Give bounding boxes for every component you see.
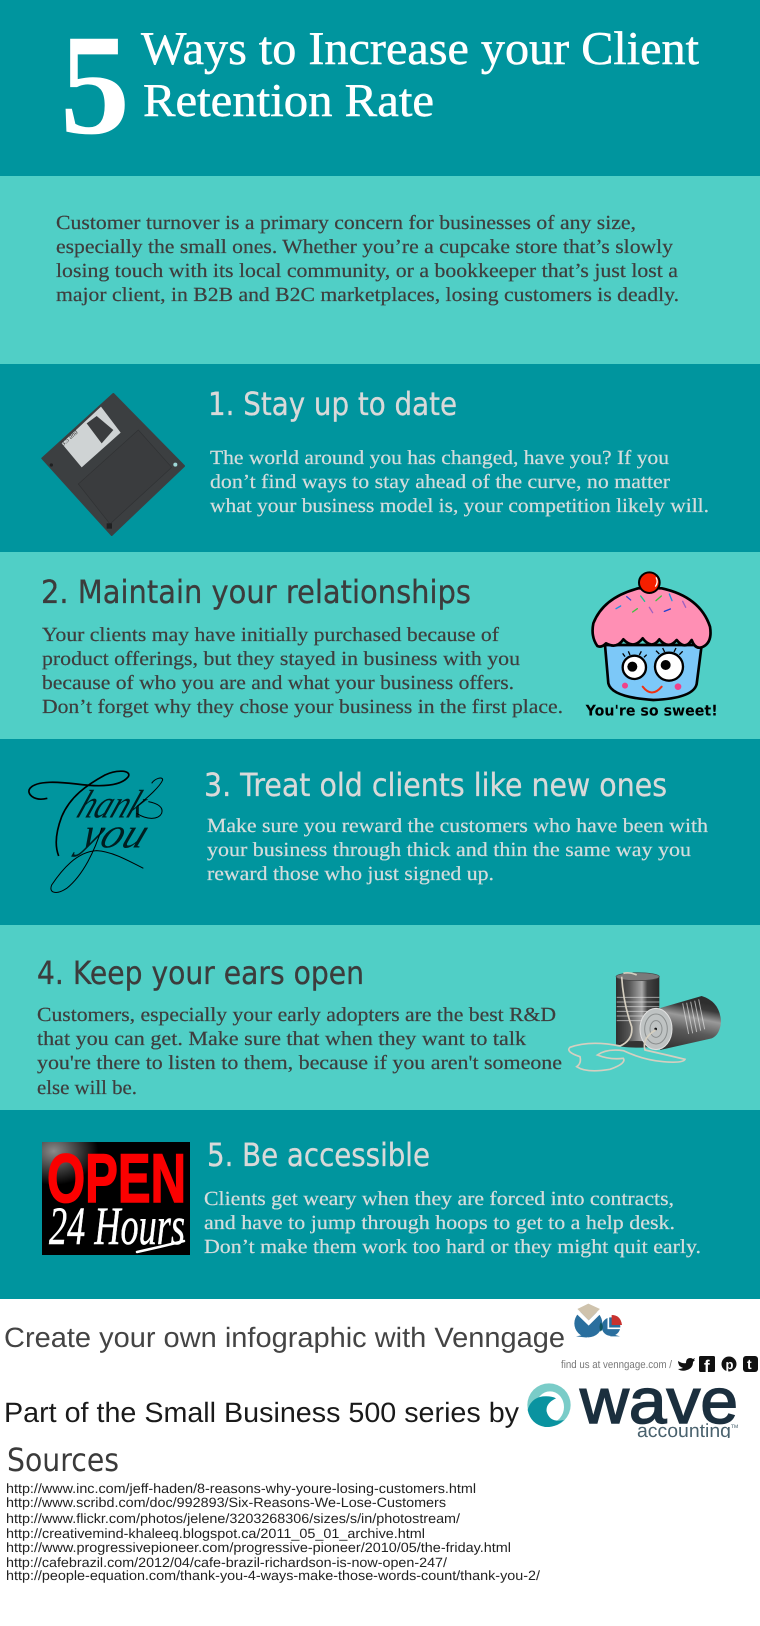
- body text: and have to jump through hoops to get to a help desk.: [204, 1212, 675, 1234]
- icon: social media icons: t: [747, 1356, 752, 1372]
- intro text: especially the small ones. Whether you’re a cupcake store that’s slowly: [56, 236, 673, 258]
- venngage credit text: Create your own infographic with Venngage: [4, 1322, 565, 1353]
- heading: 2. Maintain your relationships: [41, 573, 471, 611]
- body text: Don’t make them work too hard or they might quit early.: [204, 1236, 701, 1258]
- body text: Don’t forget why they chose your business in the first place.: [42, 696, 563, 718]
- heading: 4. Keep your ears open: [37, 954, 364, 992]
- title text: Retention Rate: [143, 75, 434, 127]
- icon: thank you script: you: [71, 809, 157, 857]
- body text: [207, 815, 708, 885]
- intro text: [56, 212, 679, 306]
- body text: don’t find ways to stay ahead of the curve, no matter: [210, 471, 670, 493]
- panel: footer: [4, 1304, 758, 1583]
- body text: [37, 1004, 562, 1099]
- body text: product offerings, but they stayed in business with you: [42, 648, 520, 670]
- source links: http://www.scribd.com/doc/992893/Six-Reasons-We-Lose-Customers: [6, 1495, 446, 1510]
- series credit text: Part of the Small Business 500 series by: [4, 1397, 519, 1428]
- body text: you're there to listen to them, because if you aren't someone: [37, 1052, 562, 1074]
- sources heading: Sources: [7, 1441, 119, 1479]
- intro text: losing touch with its local community, or a bookkeeper that’s just lost a: [56, 260, 678, 282]
- body text: else will be.: [37, 1077, 137, 1099]
- script words: hank: [71, 782, 155, 826]
- source links: http://people-equation.com/thank-you-4-ways-make-those-words-count/thank-you-2/: [6, 1568, 540, 1583]
- sign word OPEN: OPEN: [47, 1140, 186, 1217]
- icon: venngage logo: [574, 1304, 622, 1338]
- label text on disk: 3.5 and: [59, 428, 80, 447]
- body text: [42, 624, 563, 718]
- title text: [141, 23, 699, 127]
- intro text: major client, in B2B and B2C marketplaces, losing customers is deadly.: [56, 284, 679, 306]
- icon: tin can telephone: [569, 973, 721, 1071]
- body text: that you can get. Make sure that when they want to talk: [37, 1028, 526, 1050]
- icon: cupcake: [585, 572, 718, 719]
- body text: The world around you has changed, have you? If you: [210, 447, 669, 469]
- wordmark wave: wave: [579, 1365, 738, 1437]
- body text: Your clients may have initially purchased because of: [42, 624, 499, 646]
- source links: http://cafebrazil.com/2012/04/cafe-brazil-richardson-is-now-open-247/: [6, 1555, 447, 1570]
- caption text: You're so sweet!: [585, 702, 718, 719]
- body text: [204, 1188, 701, 1258]
- body text: Make sure you reward the customers who have been with: [207, 815, 708, 837]
- title numeral 5: 5: [60, 6, 130, 165]
- icon: open 24 hours sign: [42, 1140, 190, 1256]
- heading: 3. Treat old clients like new ones: [204, 766, 667, 804]
- panel: intro: [0, 176, 760, 364]
- logo: wave accounting: [527, 1383, 738, 1438]
- panel: section 3 treat old clients: [0, 739, 760, 925]
- body text: your business through thick and thin the same way you: [207, 839, 691, 861]
- body text: Customers, especially your early adopters are the best R&D: [37, 1004, 556, 1026]
- heading: 1. Stay up to date: [208, 385, 457, 423]
- panel: section 4 keep ears open: [0, 925, 760, 1110]
- source links: http://www.progressivepioneer.com/progressive-pioneer/2010/05/the-friday.html: [6, 1540, 511, 1555]
- panel: section 1 stay up to date: [0, 364, 760, 552]
- find us text: find us at venngage.com /: [561, 1359, 673, 1371]
- body text: because of who you are and what your business offers.: [42, 672, 514, 694]
- icon: social media icons: p: [726, 1357, 734, 1372]
- body text: [210, 447, 709, 517]
- panel: title band: [0, 0, 760, 176]
- icon: floppy disk: [42, 394, 184, 535]
- source links: http://creativemind-khaleeq.blogspot.ca/2011_05_01_archive.html: [6, 1526, 425, 1541]
- source links: http://www.inc.com/jeff-haden/8-reasons-why-youre-losing-customers.html: [6, 1481, 476, 1496]
- panel: section 2 maintain relationships: [0, 552, 760, 739]
- title text: Ways to Increase your Client: [141, 23, 699, 75]
- sign words 24 Hours: 24 Hours: [49, 1196, 185, 1256]
- body text: what your business model is, your competition likely will.: [210, 495, 709, 517]
- icon: social media icons: [678, 1356, 758, 1376]
- icon: thank you script: [29, 771, 163, 892]
- wordmark accounting: accounting: [637, 1421, 731, 1442]
- intro text: Customer turnover is a primary concern for businesses of any size,: [56, 212, 636, 234]
- body text: Clients get weary when they are forced into contracts,: [204, 1188, 674, 1210]
- wave mark: [527, 1383, 571, 1427]
- source links: http://www.flickr.com/photos/jelene/3203268306/sizes/s/in/photostream/: [6, 1511, 460, 1526]
- panel: section 5 be accessible: [0, 1110, 760, 1299]
- trademark: TM: [731, 1424, 738, 1430]
- source links: [6, 1481, 540, 1583]
- body text: reward those who just signed up.: [207, 863, 494, 885]
- heading: 5. Be accessible: [207, 1136, 430, 1174]
- icon: social media icons: f: [704, 1357, 710, 1376]
